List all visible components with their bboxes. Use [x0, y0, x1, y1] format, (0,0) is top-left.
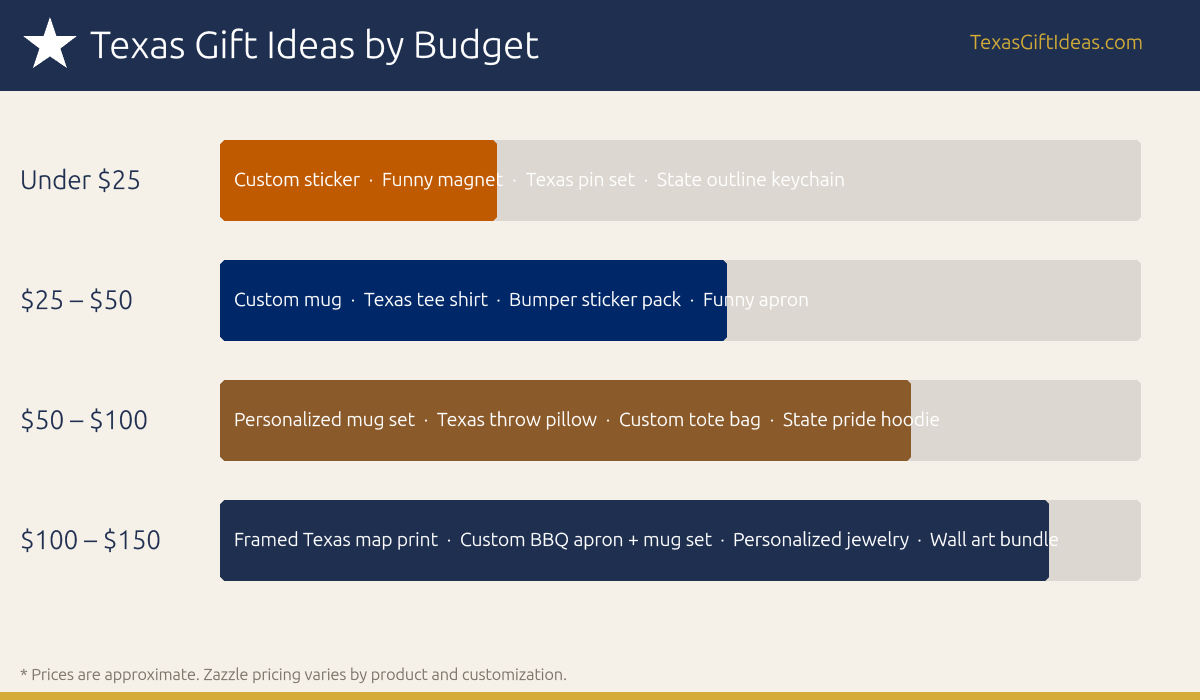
- gift list: ·: [496, 288, 501, 310]
- gift list: Funny magnet: [382, 168, 504, 190]
- gift list: ·: [770, 408, 774, 430]
- bottom accent bar: [0, 692, 1200, 700]
- gift list: [234, 408, 940, 430]
- gift list: ·: [369, 168, 373, 190]
- bar fill: [220, 260, 727, 341]
- price label: Under $25: [20, 165, 141, 194]
- gift list: ·: [917, 528, 922, 550]
- gift list: Texas throw pillow: [437, 408, 597, 430]
- gift list: Custom tote bag: [619, 408, 761, 430]
- gift list: State pride hoodie: [783, 408, 940, 430]
- bar track: [220, 140, 1141, 221]
- gift list: State outline keychain: [657, 168, 845, 190]
- gift list: ·: [447, 528, 451, 550]
- bar track: [220, 380, 1141, 461]
- gift list: Wall art bundle: [930, 528, 1059, 550]
- gift list: ·: [606, 408, 610, 430]
- bar track: [220, 260, 1141, 341]
- footnote: * Prices are approximate. Zazzle pricing varies by product and customization.: [20, 666, 567, 684]
- row: Under $25: [20, 140, 1141, 221]
- price label: $50 – $100: [20, 405, 148, 434]
- price label: $100 – $150: [20, 525, 161, 554]
- header band: [0, 0, 1200, 91]
- price label: $25 – $50: [20, 285, 133, 314]
- gift list: Bumper sticker pack: [509, 288, 681, 310]
- gift list: ·: [512, 168, 517, 190]
- title: Texas Gift Ideas by Budget: [90, 24, 539, 66]
- bar track: [220, 500, 1141, 581]
- gift list: Funny apron: [703, 288, 809, 310]
- row: $25 – $50: [20, 260, 1141, 341]
- bar fill: [220, 380, 911, 461]
- gift list: ·: [644, 168, 648, 190]
- gift list: Texas pin set: [526, 168, 636, 190]
- bar fill: [220, 140, 497, 221]
- website: TexasGiftIdeas.com: [970, 30, 1143, 53]
- gift list: Framed Texas map print: [234, 528, 439, 550]
- bar fill: [220, 500, 1049, 581]
- gift list: ·: [351, 288, 355, 310]
- gift list: Custom mug: [234, 288, 342, 310]
- gift list: Personalized mug set: [234, 408, 416, 430]
- gift list: Custom BBQ apron + mug set: [460, 528, 713, 550]
- gift list: ·: [720, 528, 725, 550]
- row: $50 – $100: [20, 380, 1141, 461]
- gift list: ·: [424, 408, 428, 430]
- gift list: [234, 528, 1059, 550]
- row: $100 – $150: [20, 500, 1141, 581]
- gift list: Personalized jewelry: [733, 528, 909, 550]
- gift list: Custom sticker: [234, 168, 360, 190]
- gift list: [234, 168, 845, 190]
- gift list: [234, 288, 809, 310]
- icon: star: [23, 17, 77, 68]
- gift list: Texas tee shirt: [364, 288, 489, 310]
- gift list: ·: [690, 288, 694, 310]
